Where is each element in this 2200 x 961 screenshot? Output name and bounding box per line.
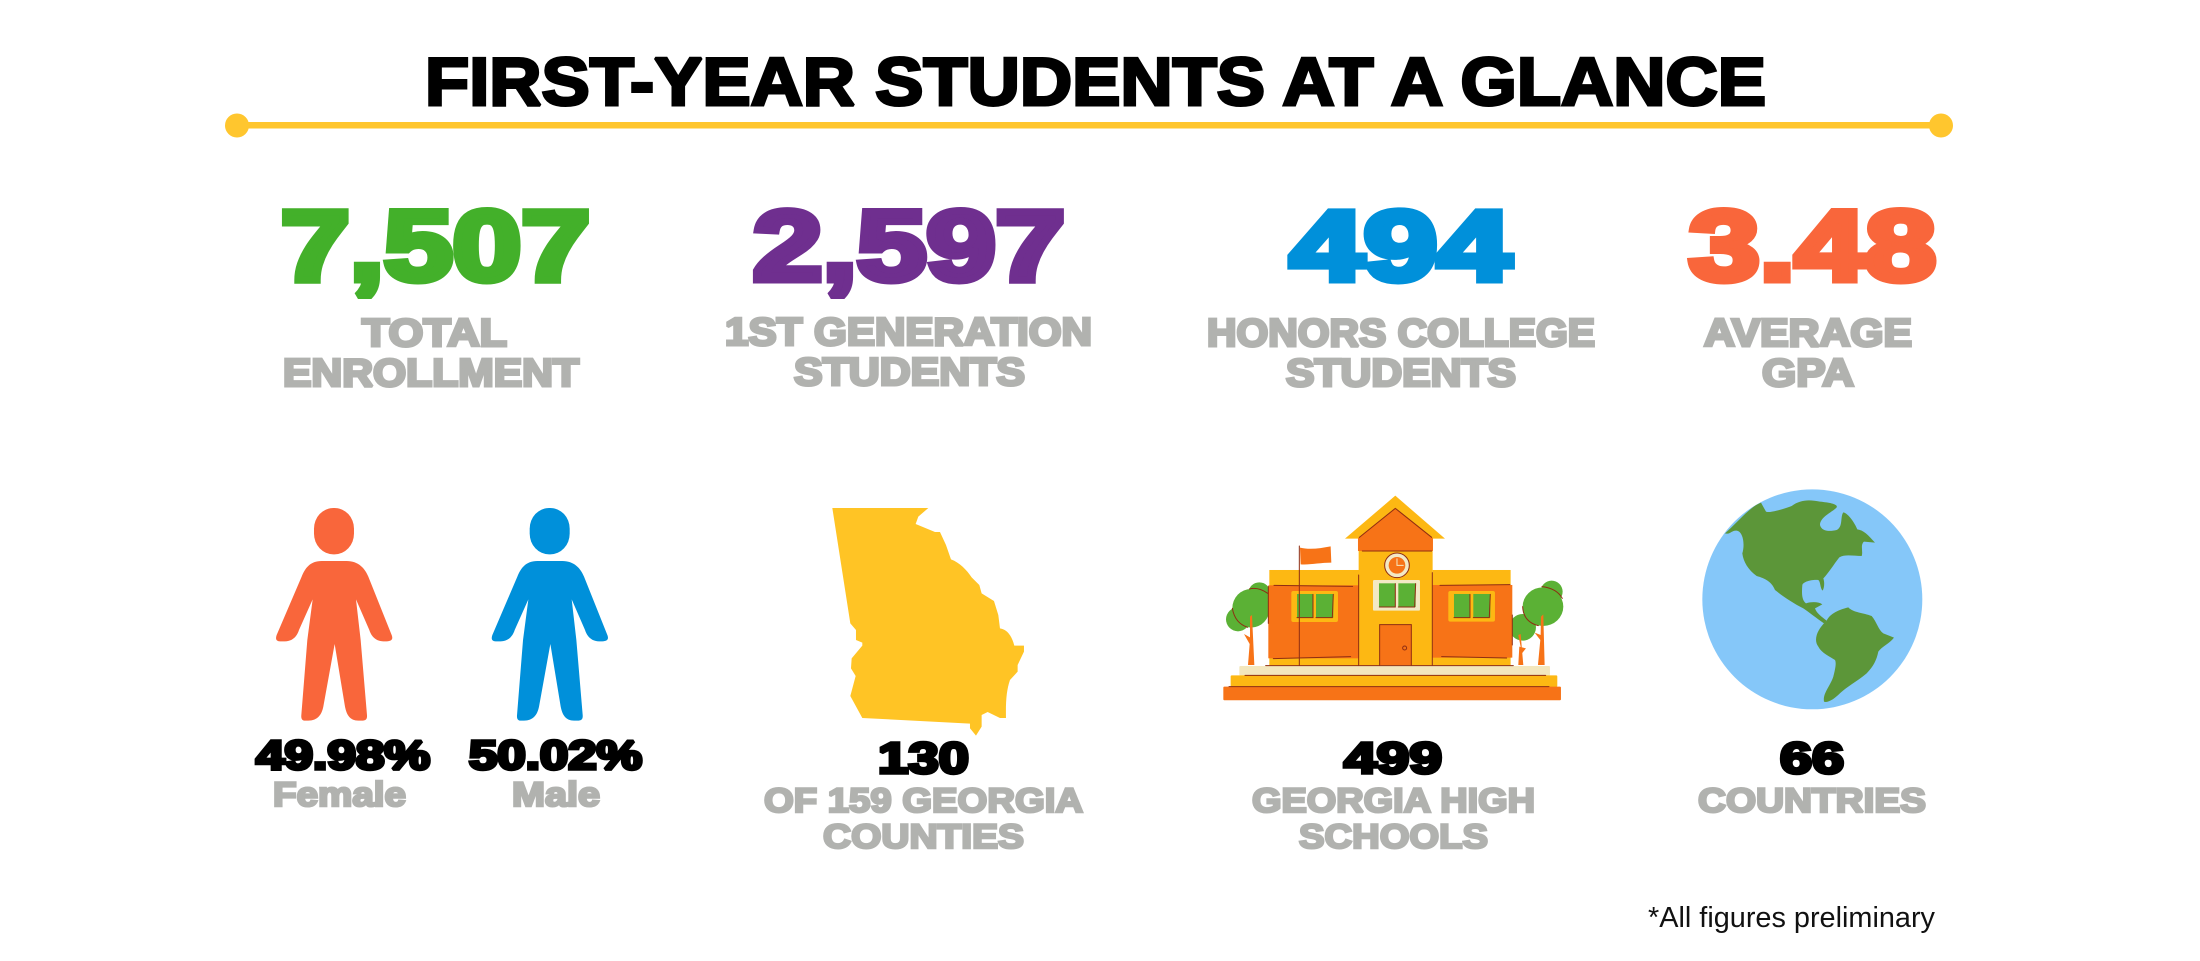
stat: first generation students bbox=[725, 190, 1092, 394]
stat: first generation students: 1ST GENERATION bbox=[725, 311, 1092, 354]
stat: average GPA: AVERAGE bbox=[1704, 312, 1912, 355]
icon: female figure bbox=[276, 508, 392, 721]
school steps bbox=[1223, 666, 1561, 700]
icon: school building bbox=[1223, 496, 1563, 700]
stat: first generation students: 2,597 bbox=[753, 190, 1065, 301]
icon: globe bbox=[1702, 489, 1922, 709]
stat: countries bbox=[1698, 734, 1926, 820]
stat: honors college students: HONORS COLLEGE bbox=[1207, 312, 1595, 355]
stat: Georgia high schools: 499 bbox=[1344, 734, 1442, 783]
school clock bbox=[1385, 553, 1409, 578]
stat: honors college students: STUDENTS bbox=[1286, 352, 1516, 395]
stat: honors college students: 494 bbox=[1290, 190, 1511, 301]
stat: female share bbox=[256, 732, 430, 814]
stat: Georgia high schools bbox=[1252, 734, 1535, 856]
title underline with end dots bbox=[225, 114, 1953, 138]
stat: average GPA: 3.48 bbox=[1689, 190, 1936, 301]
stat: countries: 66 bbox=[1780, 734, 1844, 783]
stat: countries: COUNTRIES bbox=[1698, 782, 1926, 820]
North America bbox=[1725, 500, 1875, 623]
school side windows bbox=[1291, 591, 1495, 622]
South America bbox=[1816, 607, 1894, 702]
icon: Georgia state map bbox=[832, 508, 1024, 736]
footnote: *All figures preliminary bbox=[1648, 902, 1935, 934]
stat: female share: Female bbox=[273, 776, 406, 814]
stat: total enrollment bbox=[281, 190, 590, 395]
school wings bbox=[1268, 570, 1512, 665]
stat: average GPA bbox=[1689, 190, 1936, 395]
stat: total enrollment: 7,507 bbox=[281, 190, 590, 301]
icon: right trees bbox=[1509, 581, 1563, 665]
stat: total enrollment: ENROLLMENT bbox=[283, 352, 579, 395]
stat: first generation students: STUDENTS bbox=[794, 351, 1025, 394]
stat: female share: 49.98% bbox=[256, 732, 430, 778]
stat: Georgia counties: 130 bbox=[878, 734, 969, 783]
icon: male figure bbox=[492, 508, 608, 721]
stat: total enrollment: TOTAL bbox=[362, 312, 507, 355]
school central window bbox=[1373, 580, 1420, 611]
stat: male share bbox=[469, 732, 642, 814]
stat: honors college students bbox=[1207, 190, 1595, 395]
stat: Georgia high schools: SCHOOLS bbox=[1299, 818, 1488, 856]
stat: Georgia counties bbox=[764, 734, 1083, 856]
stat: Georgia high schools: GEORGIA HIGH bbox=[1252, 782, 1535, 820]
school central tower bbox=[1345, 496, 1445, 665]
stat: male share: 50.02% bbox=[469, 732, 642, 778]
title: FIRST-YEAR STUDENTS AT A GLANCE bbox=[425, 44, 1766, 120]
stat: Georgia counties: OF 159 GEORGIA bbox=[764, 782, 1083, 820]
stat: Georgia counties: COUNTIES bbox=[823, 818, 1024, 856]
stat: male share: Male bbox=[512, 776, 600, 814]
school flag bbox=[1299, 546, 1331, 665]
school door bbox=[1380, 625, 1412, 665]
icon: left tree bbox=[1226, 582, 1270, 665]
stat: average GPA: GPA bbox=[1762, 352, 1854, 395]
